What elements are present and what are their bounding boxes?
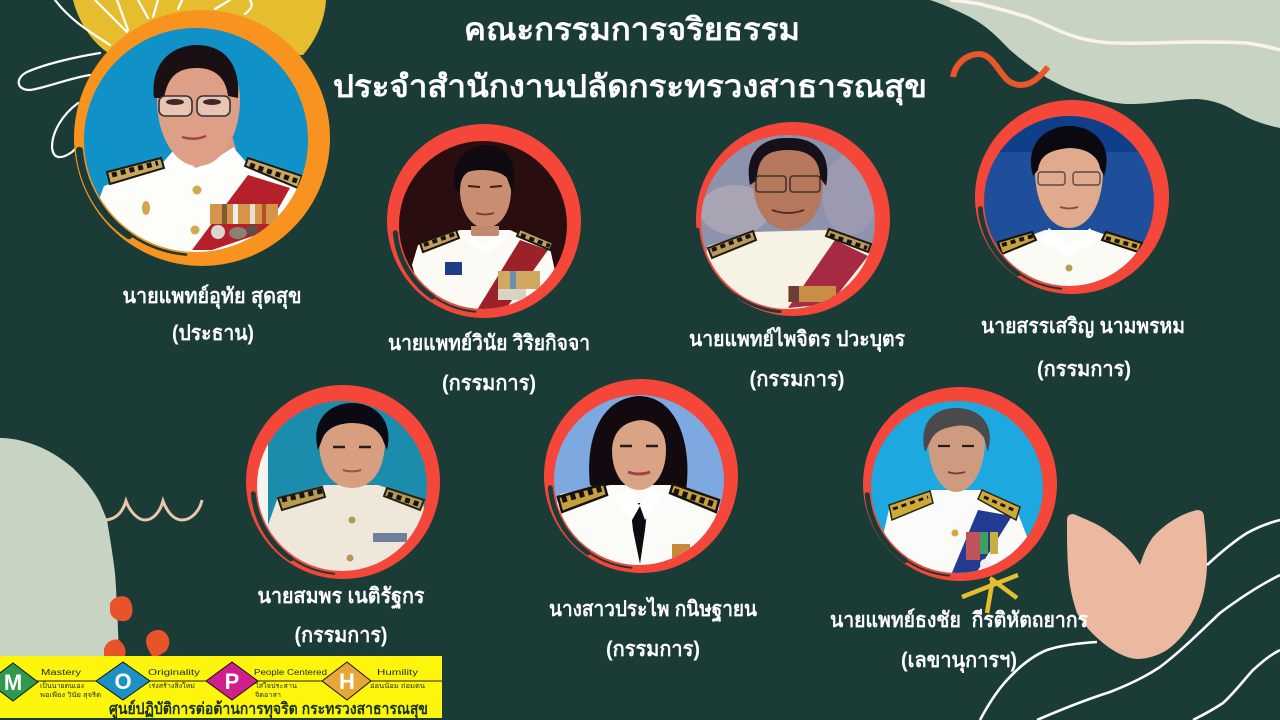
caption: member 3: นายสรรเสริญ นามพรหม <box>981 315 1185 339</box>
caption: member 3: (กรรมการ) <box>1037 358 1131 381</box>
caption: chairman: นายแพทย์อุทัย สุดสุข <box>122 284 302 310</box>
caption: member 4 <box>258 585 425 647</box>
caption: member 1: นายแพทย์วินัย วิริยกิจจา <box>388 331 590 355</box>
caption: chairman: (ประธาน) <box>172 322 254 345</box>
banner labels: ใส่ใจประสาน <box>255 682 298 690</box>
portrait: member 1 <box>387 124 581 318</box>
decoration: peach scallops <box>106 500 202 520</box>
caption: secretary: นายแพทย์ธงชัย กีรติหัตถยากร <box>830 608 1089 632</box>
banner labels: Humility <box>377 668 418 677</box>
decoration: sage shape top right <box>930 0 1280 128</box>
caption: member 2: นายแพทย์ไพจิตร ปวะบุตร <box>689 326 906 353</box>
decoration: white waves bottom right <box>980 520 1280 720</box>
decoration: yellow petal top left <box>73 0 326 55</box>
caption: member 3 <box>981 315 1185 381</box>
portrait: member 4 <box>246 385 440 579</box>
caption: member 5: (กรรมการ) <box>606 638 700 661</box>
banner labels <box>40 668 426 699</box>
caption: member 5: นางสาวประไพ กนิษฐายน <box>549 596 758 623</box>
icon: yellow asterisk <box>962 575 1018 613</box>
icon: M diamond <box>0 663 38 701</box>
title: คณะกรรมการจริยธรรม <box>464 12 800 47</box>
banner caption: ศูนย์ปฏิบัติการต่อต้านการทุจริต กระทรวงสาธารณสุข <box>109 699 428 720</box>
decoration: orange dots <box>104 596 169 656</box>
title: ประจำสำนักงานปลัดกระทรวงสาธารณสุข <box>333 69 927 106</box>
banner labels: พอเพียง วินัย สุจริต <box>40 691 101 699</box>
decoration: orange squiggle <box>953 54 1048 85</box>
caption: member 5 <box>549 596 758 661</box>
portrait: member 3 <box>975 100 1169 294</box>
icon: P diamond <box>206 662 258 700</box>
title <box>333 12 927 106</box>
banner labels: เร่งสร้างสิ่งใหม่ <box>149 681 195 690</box>
banner labels: Mastery <box>41 668 81 677</box>
banner labels: จิตอาสา <box>255 691 281 699</box>
portrait: member 5 <box>544 379 738 573</box>
caption: secretary <box>830 608 1089 674</box>
caption: member 4: นายสมพร เนติรัฐกร <box>258 585 425 610</box>
banner labels: Originality <box>148 668 200 677</box>
caption: chairman <box>122 284 302 345</box>
icon: M diamond: M <box>4 670 22 695</box>
banner labels: People Centered <box>254 668 327 677</box>
icon: P diamond: P <box>225 669 239 694</box>
caption: member 2: (กรรมการ) <box>750 368 844 391</box>
icon: H diamond: H <box>339 669 355 694</box>
caption: member 1: (กรรมการ) <box>442 372 536 395</box>
portrait: chairman <box>74 10 330 266</box>
decoration: sage blob left <box>0 438 119 656</box>
caption: member 1 <box>388 331 590 395</box>
banner labels: อ่อนน้อม ถ่อมตน <box>370 682 426 690</box>
caption: member 2 <box>689 326 906 391</box>
banner: MOPH values <box>0 656 442 720</box>
portrait: secretary <box>863 387 1057 581</box>
decoration: white flower outlines <box>19 0 252 157</box>
icon: H diamond <box>322 662 371 700</box>
decoration: cream line top right <box>950 0 1280 50</box>
icon: O diamond: O <box>114 669 132 694</box>
caption: secretary: (เลขานุการฯ) <box>901 649 1017 674</box>
banner labels: เป็นนายตนเอง <box>40 681 84 690</box>
decoration: peach tulip <box>1067 510 1207 659</box>
icon: O diamond <box>96 662 150 700</box>
caption: member 4: (กรรมการ) <box>294 624 388 647</box>
portrait: member 2 <box>696 122 890 316</box>
